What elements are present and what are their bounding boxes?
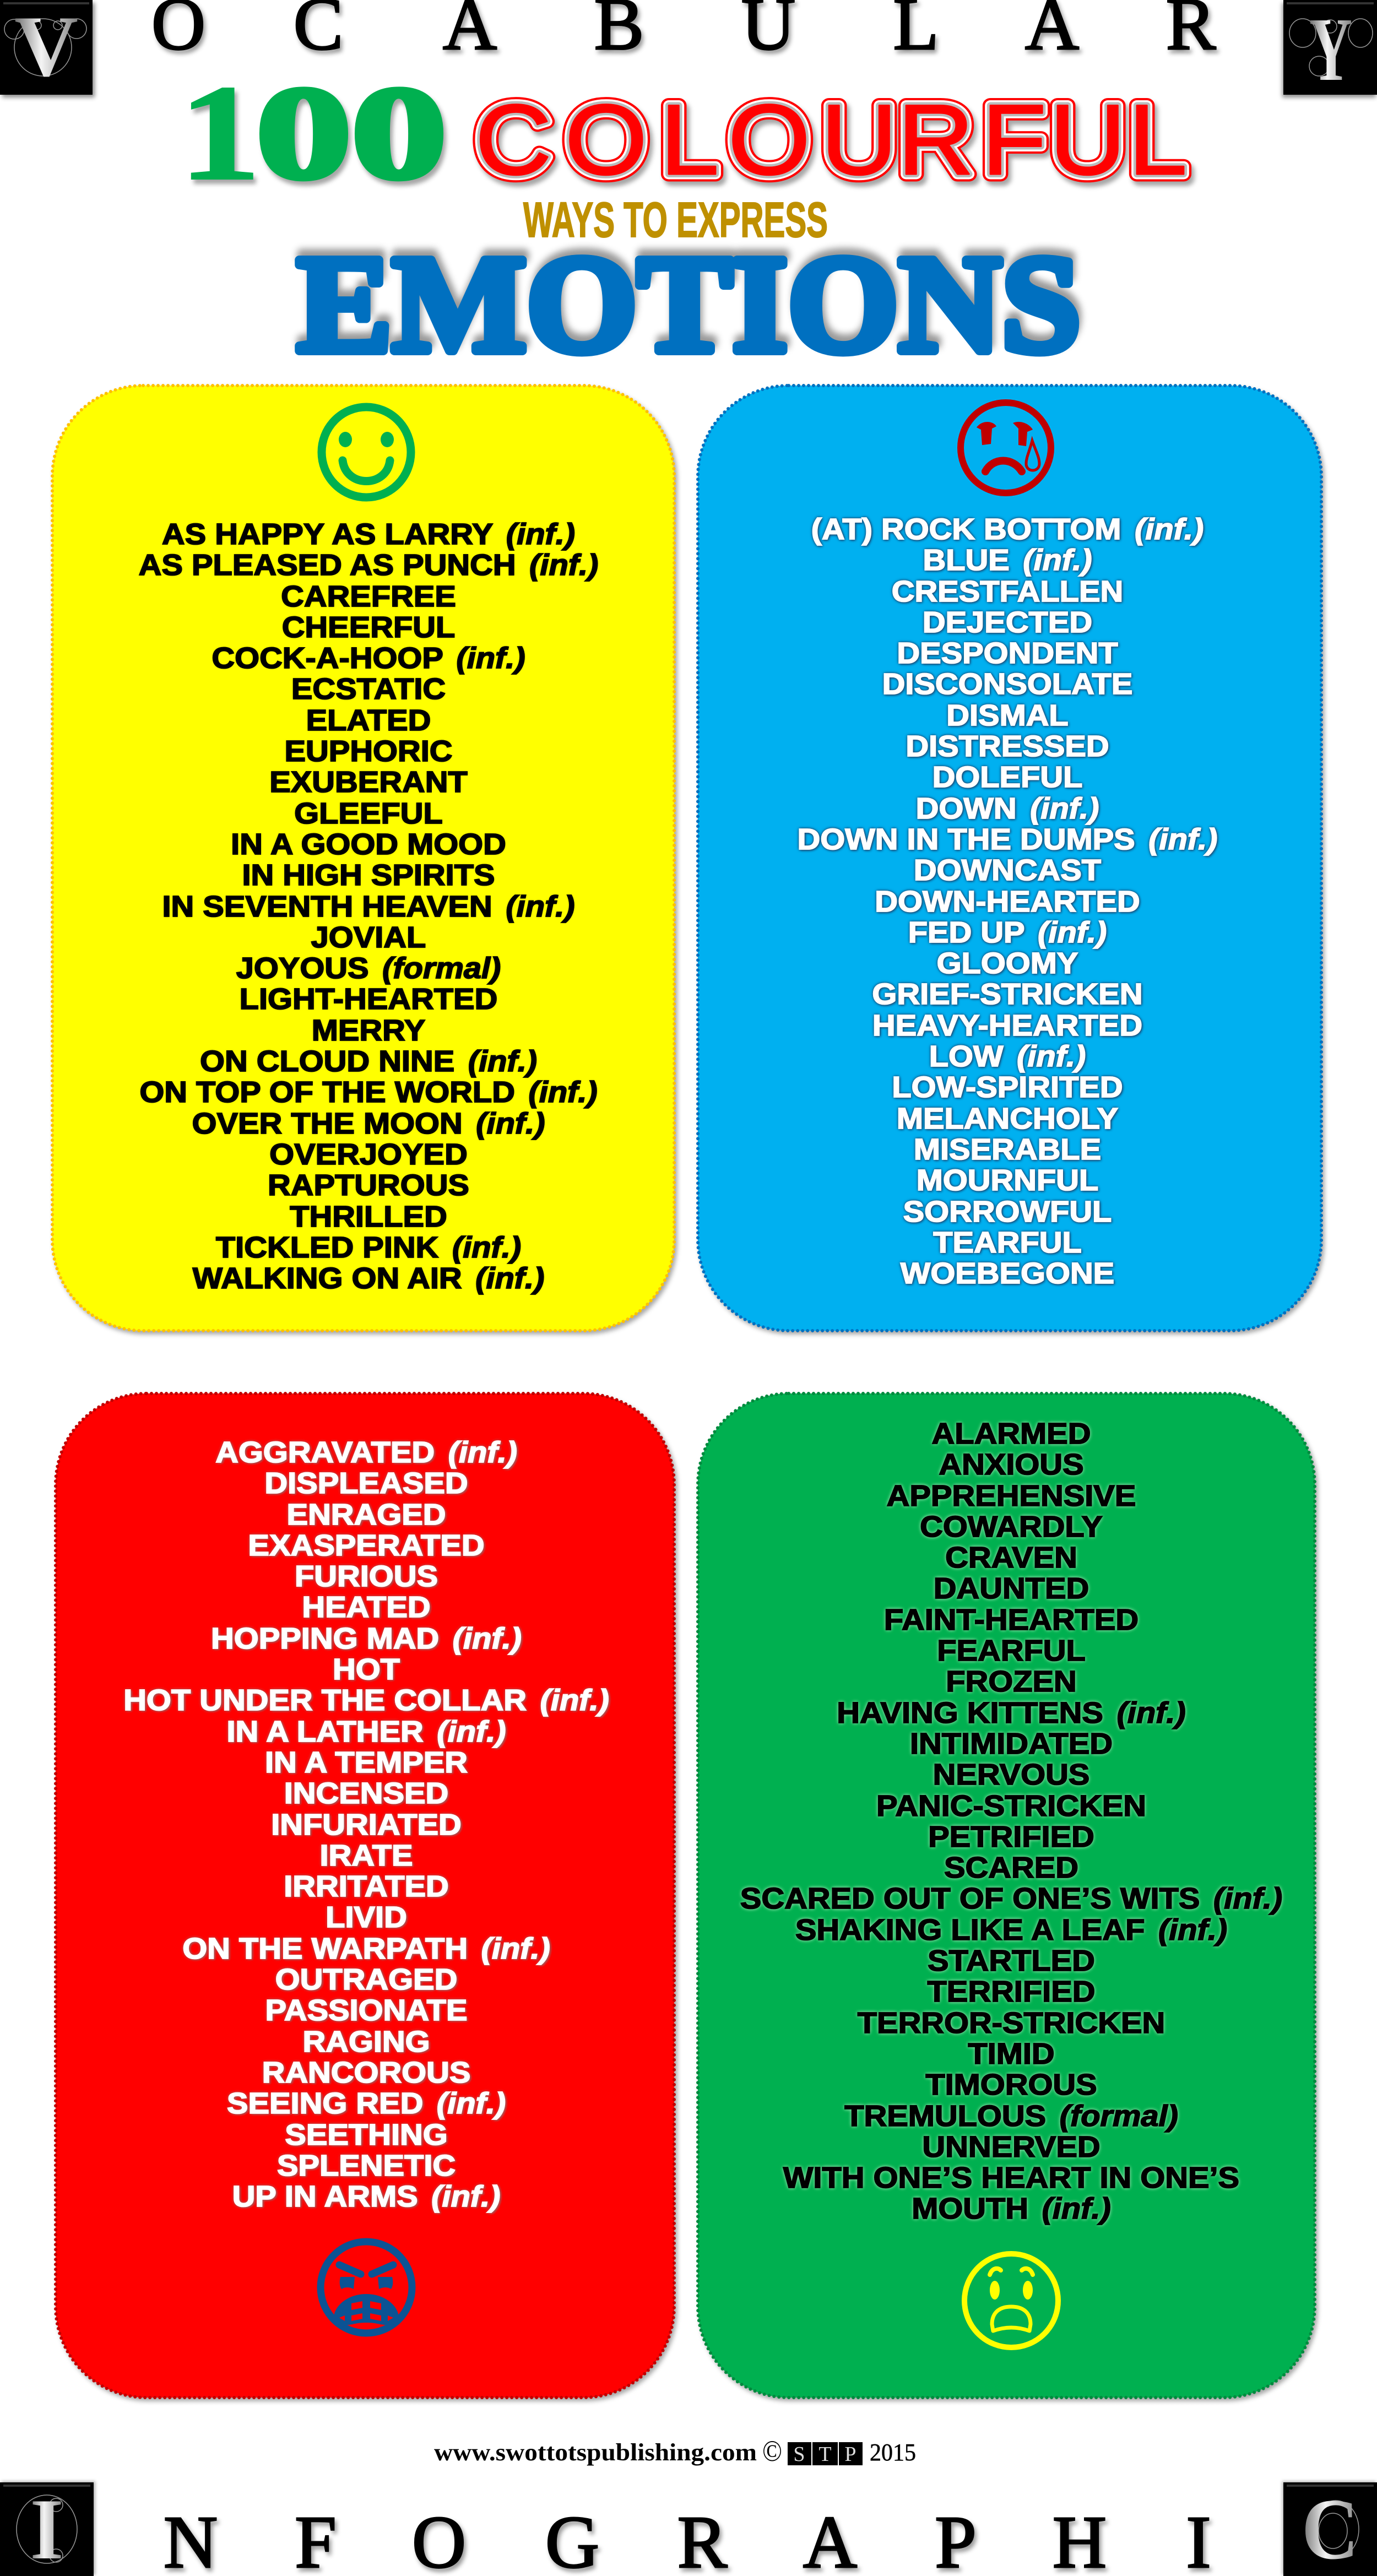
title: 100: 1 <box>178 57 261 209</box>
title: 100: 00 <box>256 59 447 206</box>
word list: sad: MISERABLE <box>914 1133 1101 1166</box>
word list: happy: MERRY <box>312 1014 425 1047</box>
word list: angry: PASSIONATE <box>265 1994 468 2027</box>
word list: angry: INCENSED <box>284 1777 448 1810</box>
word list: angry: IN A LATHER (inf.) <box>226 1715 506 1748</box>
word list: happy: OVER THE MOON (inf.) <box>192 1107 545 1140</box>
word list: fear: STARTLED <box>928 1944 1095 1977</box>
word list: happy: ON TOP OF THE WORLD (inf.) <box>139 1076 598 1109</box>
word list: sad: WOEBEGONE <box>901 1257 1114 1290</box>
word list: happy: EUPHORIC <box>285 735 452 768</box>
word list: angry: RANCOROUS <box>262 2056 470 2089</box>
word list: angry: HOPPING MAD (inf.) <box>211 1622 522 1655</box>
word list: fear: TREMULOUS (formal) <box>844 2100 1178 2133</box>
icon: happy face <box>317 403 415 501</box>
word list: happy: AS PLEASED AS PUNCH (inf.) <box>139 549 598 582</box>
word list: angry: AGGRAVATED (inf.) <box>215 1436 517 1469</box>
word list: sad: SORROWFUL <box>903 1195 1112 1228</box>
word list: angry: FURIOUS <box>295 1560 438 1593</box>
word list: happy: RAPTUROUS <box>268 1169 469 1202</box>
word list: fear: TIMOROUS <box>925 2068 1097 2101</box>
word list: sad: DOWN IN THE DUMPS (inf.) <box>798 823 1217 856</box>
footer credit: T <box>818 2443 832 2466</box>
word list: sad: GLOOMY <box>937 947 1078 980</box>
word list: angry <box>123 1436 611 2215</box>
word list: fear: INTIMIDATED <box>910 1727 1113 1760</box>
word list: fear: TIMID <box>968 2037 1055 2070</box>
word list: sad: MOURNFUL <box>917 1164 1098 1197</box>
word list: sad: GRIEF-STRICKEN <box>872 978 1143 1011</box>
word list: angry: DISPLEASED <box>264 1467 468 1500</box>
word list: sad: DOWN (inf.) <box>916 792 1099 825</box>
word list: sad: DESPONDENT <box>897 637 1118 670</box>
word list: fear: UNNERVED <box>922 2130 1100 2163</box>
panel: fear (green) <box>696 1392 1321 2404</box>
word list: fear: SCARED <box>944 1851 1078 1884</box>
word list: fear: PETRIFIED <box>928 1820 1094 1853</box>
word list: sad: DISTRESSED <box>906 730 1109 763</box>
word list: sad: MELANCHOLY <box>897 1102 1118 1135</box>
corner tile: V <box>0 0 93 95</box>
word list: sad: (AT) ROCK BOTTOM (inf.) <box>811 513 1203 546</box>
word list: fear: TERROR-STRICKEN <box>858 2006 1165 2040</box>
word list: sad: DEJECTED <box>923 606 1092 639</box>
heading: NFOGRAPHI <box>164 2501 1211 2576</box>
word list: fear: SHAKING LIKE A LEAF (inf.) <box>795 1913 1227 1946</box>
subtitle: WAYS TO EXPRESS: WAYS TO EXPRESS <box>523 193 828 248</box>
word list: fear: ANXIOUS <box>939 1448 1084 1481</box>
word list: happy: JOVIAL <box>311 921 426 954</box>
word list: sad: CRESTFALLEN <box>892 575 1123 608</box>
word list: happy: ON CLOUD NINE (inf.) <box>200 1045 537 1078</box>
word list: angry: LIVID <box>326 1901 407 1934</box>
panel: sad (blue) <box>696 384 1327 1337</box>
icon: scared face <box>962 2251 1061 2350</box>
word list: happy: OVERJOYED <box>269 1138 468 1171</box>
word list: sad: LOW (inf.) <box>929 1040 1086 1073</box>
word list: happy: TICKLED PINK (inf.) <box>216 1231 521 1264</box>
word list: happy: JOYOUS (formal) <box>236 952 501 985</box>
word list: fear: FROZEN <box>946 1665 1077 1698</box>
word list: fear: WITH ONE’S HEART IN ONE’S <box>783 2161 1239 2194</box>
heading: OCABULAR <box>151 0 1216 66</box>
word list: happy: IN A GOOD MOOD <box>231 828 506 861</box>
footer credit: S <box>793 2443 805 2466</box>
word list: happy: ELATED <box>306 704 431 737</box>
word list: sad: BLUE (inf.) <box>923 544 1092 577</box>
word list: sad: HEAVY-HEARTED <box>872 1009 1142 1042</box>
corner tile: I <box>0 2481 94 2576</box>
word list: sad <box>796 513 1219 1290</box>
title: COLOURFUL: COLOURFUL <box>475 84 1187 196</box>
word list: happy: IN SEVENTH HEAVEN (inf.) <box>162 890 575 923</box>
word list: happy: CHEERFUL <box>282 611 455 644</box>
word list: sad: DOLEFUL <box>933 761 1082 794</box>
word list: fear: SCARED OUT OF ONE’S WITS (inf.) <box>740 1882 1282 1915</box>
word list: sad: DOWN-HEARTED <box>875 885 1140 918</box>
word list: happy: ECSTATIC <box>291 673 446 706</box>
word list: sad: FED UP (inf.) <box>908 916 1107 949</box>
word list: angry: OUTRAGED <box>275 1963 457 1996</box>
word list: angry: HEATED <box>302 1591 431 1624</box>
word list: happy: GLEEFUL <box>294 797 443 830</box>
word list: fear: NERVOUS <box>933 1758 1089 1791</box>
title: EMOTIONS: EMOTIONS <box>297 227 1081 381</box>
word list: sad: DISCONSOLATE <box>882 668 1132 701</box>
word list: happy: CAREFREE <box>281 580 456 613</box>
word list: fear: APPREHENSIVE <box>887 1479 1136 1512</box>
word list: angry: UP IN ARMS (inf.) <box>232 2180 500 2213</box>
panel: happy (yellow) <box>51 384 680 1337</box>
corner tile: Y: Y <box>1309 0 1352 100</box>
word list: fear: MOUTH (inf.) <box>912 2192 1111 2225</box>
word list: sad: LOW-SPIRITED <box>892 1071 1123 1104</box>
word list: fear <box>739 1417 1284 2227</box>
word list: angry: SEEING RED (inf.) <box>227 2087 506 2120</box>
word list: fear: DAUNTED <box>934 1572 1089 1605</box>
word list: happy: EXUBERANT <box>269 766 468 799</box>
word list: fear: ALARMED <box>932 1417 1091 1450</box>
word list: angry: SEETHING <box>285 2118 448 2151</box>
icon: angry face <box>317 2238 415 2336</box>
word list: angry: RAGING <box>302 2025 430 2058</box>
word list: angry: EXASPERATED <box>248 1529 485 1562</box>
word list: happy: THRILLED <box>290 1200 447 1233</box>
footer credit: www.swottotspublishing.com <box>434 2439 757 2466</box>
word list: sad: DOWNCAST <box>914 854 1101 887</box>
word list: angry: ENRAGED <box>287 1498 446 1531</box>
word list: angry: IRATE <box>319 1839 413 1872</box>
footer credit: 2015 <box>870 2439 916 2466</box>
word list: angry: IRRITATED <box>284 1870 449 1903</box>
footer credit <box>434 2434 916 2467</box>
word list: fear: PANIC-STRICKEN <box>876 1789 1146 1823</box>
title: COLOURFUL: COLOURFUL <box>475 84 1187 196</box>
corner tile: I: I <box>30 2481 64 2576</box>
word list: happy: WALKING ON AIR (inf.) <box>193 1262 544 1295</box>
corner tile: V: V <box>14 0 78 95</box>
word list: happy <box>139 518 598 1295</box>
word list: fear: HAVING KITTENS (inf.) <box>837 1696 1186 1729</box>
title: COLOURFUL: COLOURFUL <box>475 84 1187 196</box>
word list: fear: TERRIFIED <box>928 1975 1095 2008</box>
word list: happy: LIGHT-HEARTED <box>240 983 497 1016</box>
word list: sad: TEARFUL <box>933 1226 1082 1259</box>
word list: angry: SPLENETIC <box>277 2149 456 2182</box>
panel: angry (red) <box>54 1392 680 2404</box>
title: COLOURFUL: COLOURFUL <box>475 84 1187 196</box>
word list: happy: COCK-A-HOOP (inf.) <box>212 642 525 675</box>
title: 100 <box>178 57 447 209</box>
word list: sad: DISMAL <box>946 699 1069 732</box>
icon: crying face <box>957 399 1054 496</box>
corner tile: C <box>1283 2481 1377 2576</box>
word list: happy: AS HAPPY AS LARRY (inf.) <box>162 518 575 551</box>
word list: angry: HOT UNDER THE COLLAR (inf.) <box>123 1684 609 1717</box>
word list: angry: INFURIATED <box>271 1808 462 1841</box>
word list: angry: HOT <box>333 1653 400 1686</box>
word list: fear: COWARDLY <box>920 1510 1103 1543</box>
word list: angry: ON THE WARPATH (inf.) <box>182 1932 550 1965</box>
footer credit: © <box>762 2434 782 2467</box>
footer credit: P <box>844 2443 856 2466</box>
word list: fear: FEARFUL <box>937 1634 1086 1667</box>
word list: angry: IN A TEMPER <box>265 1746 468 1779</box>
word list: happy: IN HIGH SPIRITS <box>242 859 495 892</box>
word list: fear: FAINT-HEARTED <box>884 1603 1139 1636</box>
corner tile: C: C <box>1302 2481 1359 2576</box>
word list: fear: CRAVEN <box>945 1541 1077 1574</box>
